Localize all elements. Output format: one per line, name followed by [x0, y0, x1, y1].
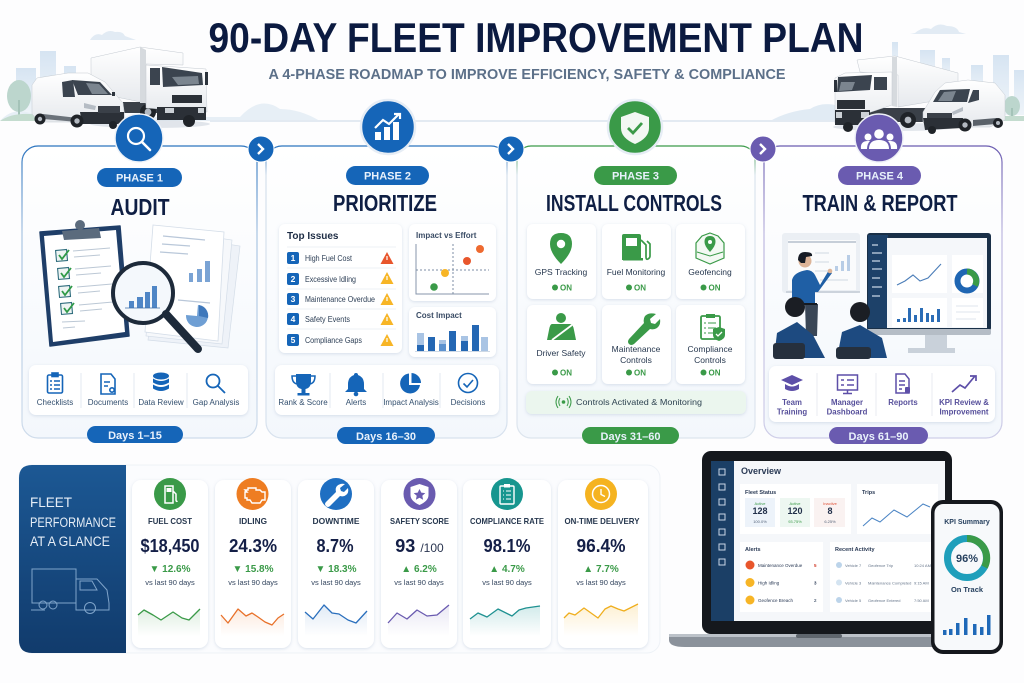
banner: controls activated — [526, 391, 746, 414]
icon: data review — [153, 372, 169, 391]
tool row: audit: Documents — [88, 398, 128, 407]
tool row: train and report: KPI Review & — [939, 398, 989, 407]
control card: compliance controls: ON — [708, 368, 721, 378]
control card: gps tracking: ON — [560, 284, 572, 292]
tool row: prioritize: Impact Analysis — [383, 398, 439, 407]
card: top issues: 4 — [291, 314, 296, 324]
kpi card: compliance rate: ▲ 4.7% — [489, 564, 525, 575]
dashboard card: fleet status: 100.0% — [753, 519, 767, 524]
icon: bell — [345, 373, 367, 396]
dashboard card: recent activity: Vehicle 5 — [845, 598, 862, 603]
tool row: prioritize: Rank & Score — [278, 398, 328, 407]
kpi card: compliance rate: 98.1% — [484, 536, 530, 556]
dashboard card: trips: Trips — [862, 490, 875, 496]
card: top issues: 5 — [291, 335, 296, 345]
dashboard card: alerts: Geofence Breach — [758, 598, 794, 603]
panel: phase 2 prioritize — [266, 146, 507, 444]
icon: phase 4 team badge — [855, 114, 903, 162]
dashboard card: alerts: High Idling — [758, 580, 780, 586]
icon: phase 1 magnifier badge — [115, 114, 163, 162]
control card: geofencing: Geofencing — [688, 267, 732, 277]
tool row: audit — [29, 365, 248, 415]
subtitle: A 4-PHASE ROADMAP TO IMPROVE EFFICIENCY, SAFETY & COMPLIANCE — [268, 67, 786, 83]
phone bar chart — [943, 615, 990, 635]
control card: maintenance controls: Controls — [620, 355, 652, 365]
illustration: clipboard with magnifier — [40, 220, 240, 349]
kpi card: safety score: ▲ 6.2% — [401, 564, 437, 575]
dashboard sidebar — [711, 461, 734, 621]
days 31-60 pill — [582, 427, 679, 444]
sidebar: navy heading block: PERFORMANCE — [30, 515, 116, 530]
kpi card: fuel cost: vs last 90 days — [145, 578, 195, 587]
dashboard card: fleet status: 93.75% — [788, 519, 802, 524]
card: top issues: 2 — [291, 274, 296, 284]
days 16-30 pill: Days 16–30 — [356, 431, 416, 443]
laptop dashboard — [669, 451, 965, 647]
dashboard card: recent activity: Geofence Entered — [868, 598, 900, 603]
icon: trophy — [292, 374, 315, 396]
kpi card: downtime: DOWNTIME — [312, 516, 360, 526]
install controls heading: INSTALL CONTROLS — [546, 190, 722, 216]
kpi card: fuel cost: $18,450 — [140, 536, 200, 556]
kpi card: fuel cost — [132, 478, 208, 648]
phase 1 pill: PHASE 1 — [116, 172, 163, 184]
illustration: training session with dashboard — [773, 233, 991, 359]
panel: phase 3 install controls — [517, 146, 755, 444]
days 1-15 pill — [87, 426, 183, 443]
phase 4 pill: PHASE 4 — [856, 170, 904, 182]
card: top issues: Excessive Idling — [305, 275, 356, 284]
days 61-90 pill — [829, 427, 928, 444]
icon: graduation cap — [781, 375, 803, 391]
illustration: white van left — [32, 73, 125, 129]
phase 2 pill — [346, 166, 429, 185]
control card: maintenance controls: Maintenance — [612, 344, 661, 354]
kpi card: on-time delivery: 96.4% — [576, 536, 626, 556]
icon: phase 2 growth chart badge — [361, 100, 415, 154]
kpi card: fuel cost: ▼ 12.6% — [149, 564, 191, 575]
tool row: audit: Data Review — [138, 398, 184, 407]
control card: driver safety: Driver Safety — [536, 348, 586, 358]
tool row: prioritize: Decisions — [451, 398, 485, 407]
tool row: train and report: Reports — [888, 398, 918, 407]
arrow: phase 3 to 4 — [750, 136, 776, 162]
title: 90-DAY FLEET IMPROVEMENT PLAN — [208, 14, 864, 61]
kpi card: idling: ▼ 15.8% — [232, 564, 274, 575]
phone kpi summary — [931, 500, 1003, 654]
control card: fuel monitoring: ON — [634, 284, 646, 292]
phase 1 pill — [97, 168, 182, 187]
dashboard card: alerts: 3 — [814, 580, 817, 586]
control card: gps tracking — [527, 224, 596, 299]
kpi card: on-time delivery: ▲ 7.7% — [583, 564, 619, 575]
card: top issues: 3 — [291, 294, 296, 304]
illustration: white van right — [923, 80, 1005, 134]
phase 3 pill — [594, 166, 677, 185]
panel: fleet performance at a glance — [19, 465, 660, 653]
days 31-60 pill: Days 31–60 — [601, 431, 660, 443]
phase 2 pill: PHASE 2 — [364, 170, 411, 182]
card: top issues: Compliance Gaps — [305, 336, 362, 345]
tool row: train and report: Improvement — [940, 408, 989, 416]
icon: manager dashboard — [838, 375, 858, 394]
control card: gps tracking: GPS Tracking — [535, 267, 587, 277]
control card: geofencing — [676, 224, 745, 299]
card: top issues: Maintenance Overdue — [305, 295, 375, 304]
control card: driver safety: ON — [560, 368, 572, 378]
card: cost impact chart: Cost Impact — [416, 311, 462, 320]
panel: phase 4 train and report — [764, 146, 1002, 444]
card: impact vs effort chart — [409, 224, 496, 301]
sidebar: navy heading block: FLEET — [30, 495, 72, 510]
tool row: train and report — [769, 366, 995, 422]
dashboard card: trips — [857, 484, 938, 534]
kpi card: idling: IDLING — [239, 516, 267, 526]
dashboard card: recent activity: Vehicle 3 — [845, 580, 862, 586]
kpi card: fuel cost: FUEL COST — [148, 516, 193, 526]
train and report heading: TRAIN & REPORT — [802, 190, 958, 216]
dashboard card: recent activity: Recent Activity — [835, 547, 875, 553]
donut chart: 96 percent — [948, 538, 987, 578]
dashboard card: fleet status: Active — [790, 501, 801, 506]
arrow: phase 2 to 3 — [498, 136, 524, 162]
dashboard card: fleet status: Fleet Status — [745, 490, 776, 496]
sidebar: navy heading block — [19, 465, 126, 653]
dashboard card: recent activity: 9:15 AM — [914, 580, 929, 586]
card: cost impact chart — [409, 307, 496, 357]
kpi card: idling — [215, 478, 291, 648]
illustration: white truck right — [833, 56, 958, 132]
icon: kpi trend — [952, 376, 976, 392]
kpi card: downtime: ▼ 18.3% — [315, 564, 357, 575]
control card: driver safety — [527, 305, 596, 384]
sidebar: navy heading block: AT A GLANCE — [30, 534, 110, 549]
control card: maintenance controls — [602, 305, 671, 384]
kpi card: downtime: 8.7% — [316, 536, 354, 556]
arrow: phase 1 to 2 — [248, 136, 274, 162]
card: top issues: Top Issues — [287, 231, 339, 242]
tool row: train and report: Team — [782, 398, 802, 407]
tool row: train and report: Training — [777, 408, 807, 416]
control card: compliance controls: Controls — [694, 355, 726, 365]
prioritize heading: PRIORITIZE — [333, 190, 437, 216]
phone status label: On Track — [951, 585, 984, 594]
kpi card: compliance rate: vs last 90 days — [482, 578, 532, 587]
tool row: train and report: Dashboard — [827, 408, 868, 416]
card: top issues: Safety Events — [305, 315, 350, 324]
dashboard card: recent activity — [830, 542, 935, 612]
kpi card: downtime: vs last 90 days — [311, 578, 361, 587]
control card: compliance controls: Compliance — [688, 344, 733, 354]
dashboard heading: Overview — [741, 466, 782, 476]
audit heading: AUDIT — [110, 194, 170, 220]
dashboard card: alerts: Maintenance Overdue — [758, 563, 803, 568]
kpi card: safety score: vs last 90 days — [394, 578, 444, 587]
dashboard card: fleet status: 8 — [827, 506, 833, 516]
dashboard card: fleet status: Active — [755, 501, 766, 506]
control card: compliance controls — [676, 305, 745, 384]
phase 3 pill: PHASE 3 — [612, 170, 659, 182]
background skyline left — [0, 31, 320, 121]
illustration: white truck left — [90, 47, 210, 128]
kpi card: safety score — [381, 478, 457, 648]
phone heading: KPI Summary — [944, 519, 990, 526]
card: top issues: High Fuel Cost — [305, 254, 353, 263]
icon: reports — [896, 374, 909, 393]
dashboard card: fleet status — [740, 484, 851, 534]
phase 4 pill — [838, 166, 921, 185]
banner: controls activated: Controls Activated & Monitoring — [576, 397, 702, 407]
dashboard card: fleet status: Inactive — [823, 501, 838, 506]
kpi card: safety score: SAFETY SCORE — [390, 516, 449, 526]
donut chart: 96 percent: 96% — [956, 553, 978, 565]
dashboard card: recent activity: Geofence Trip — [868, 563, 894, 568]
dashboard card: fleet status: 6.25% — [824, 519, 836, 524]
icon: truck outline — [31, 569, 109, 614]
card: top issues: 1 — [291, 253, 296, 263]
background skyline right — [770, 25, 1024, 121]
dashboard card: fleet status: 128 — [752, 506, 768, 516]
control card: maintenance controls: ON — [634, 368, 646, 378]
control card: geofencing: ON — [708, 284, 721, 292]
icon: phase 3 shield badge — [608, 100, 662, 154]
card: impact vs effort chart: Impact vs Effort — [416, 231, 477, 240]
panel: phase 1 audit — [22, 146, 257, 443]
dashboard card: fleet status: 120 — [787, 506, 803, 516]
icon: gap analysis — [206, 374, 225, 393]
tool row: audit: Gap Analysis — [193, 398, 239, 407]
dashboard card: recent activity: Maintenance Completed — [868, 580, 911, 586]
tool row: train and report: Manager — [831, 398, 863, 407]
tool row: audit: Checklists — [37, 398, 73, 407]
icon: checklists — [48, 373, 62, 393]
dashboard card: recent activity: 7:50 AM — [914, 598, 929, 603]
kpi card: on-time delivery — [558, 478, 648, 648]
days 16-30 pill — [337, 427, 435, 444]
dashboard card: alerts — [740, 542, 823, 612]
icon: decisions check — [458, 374, 478, 392]
kpi card: safety score: 93 /100 — [395, 536, 444, 556]
tool row: prioritize — [275, 365, 499, 415]
dashboard card: recent activity: 10:24 AM — [914, 563, 931, 568]
dashboard card: alerts: Alerts — [745, 547, 761, 553]
days 1-15 pill: Days 1–15 — [108, 430, 162, 442]
icon: documents — [101, 374, 115, 394]
kpi card: idling: vs last 90 days — [228, 578, 278, 587]
days 61-90 pill: Days 61–90 — [849, 431, 908, 443]
kpi card: downtime — [298, 478, 374, 648]
icon: pie — [400, 373, 421, 393]
kpi card: on-time delivery: ON-TIME DELIVERY — [564, 516, 640, 526]
card: top issues — [279, 224, 402, 353]
kpi card: on-time delivery: vs last 90 days — [576, 578, 626, 587]
kpi card: compliance rate — [463, 478, 551, 648]
kpi card: idling: 24.3% — [229, 536, 277, 556]
dashboard card: alerts: 5 — [814, 563, 817, 568]
control card: fuel monitoring: Fuel Monitoring — [607, 267, 666, 277]
control card: fuel monitoring — [602, 224, 671, 299]
dashboard card: recent activity: Vehicle 7 — [845, 563, 862, 568]
kpi card: compliance rate: COMPLIANCE RATE — [470, 516, 544, 526]
horizon line — [210, 120, 850, 122]
tool row: prioritize: Alerts — [346, 398, 366, 407]
dashboard card: alerts: 2 — [814, 598, 817, 603]
